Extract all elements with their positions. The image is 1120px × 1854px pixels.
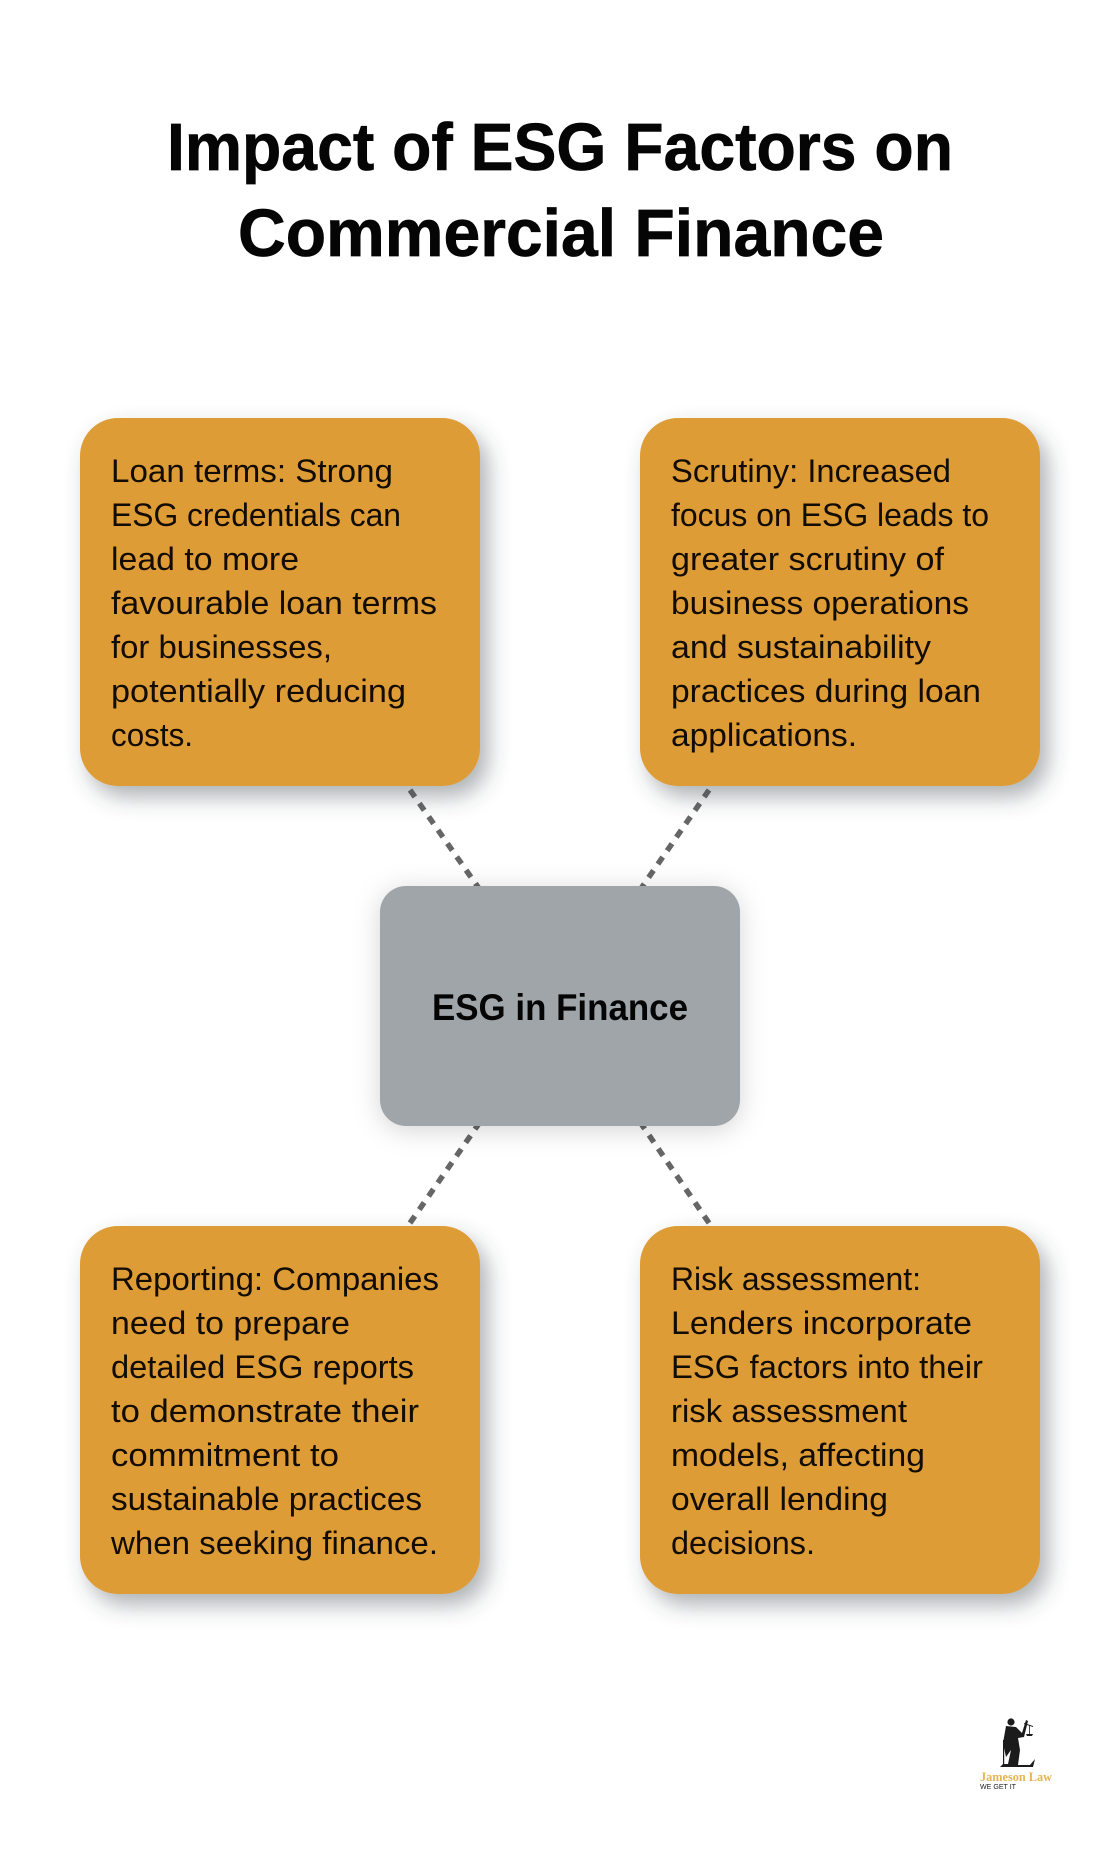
title: Commercial Finance bbox=[238, 196, 884, 271]
title: Impact of ESG Factors on bbox=[167, 110, 953, 185]
panel: risk assessment: models, affecting bbox=[671, 1437, 925, 1473]
panel: centre node: ESG in Finance bbox=[432, 987, 688, 1028]
panel: reporting: when seeking finance. bbox=[110, 1525, 438, 1561]
connector: scrutiny to centre bbox=[640, 790, 709, 890]
panel: risk assessment: Risk assessment: bbox=[671, 1261, 921, 1297]
icon: lady justice bbox=[1000, 1718, 1035, 1767]
panel: scrutiny: Scrutiny: Increased bbox=[671, 453, 951, 489]
panel: reporting: sustainable practices bbox=[111, 1481, 422, 1517]
connector: loan terms to centre bbox=[410, 790, 480, 890]
panel: reporting: need to prepare bbox=[111, 1305, 350, 1341]
panel: scrutiny: practices during loan bbox=[671, 673, 981, 709]
panel: reporting bbox=[80, 1226, 480, 1594]
panel: reporting: detailed ESG reports bbox=[111, 1349, 414, 1385]
panel: reporting: commitment to bbox=[111, 1437, 339, 1473]
panel: scrutiny: business operations bbox=[671, 585, 969, 621]
panel: loan terms: Loan terms: Strong bbox=[111, 453, 393, 489]
panel: risk assessment: decisions. bbox=[671, 1525, 815, 1561]
title bbox=[167, 110, 953, 271]
panel: scrutiny: applications. bbox=[671, 717, 857, 753]
logo: Jameson Law: WE GET IT bbox=[980, 1782, 1016, 1791]
panel: risk assessment: risk assessment bbox=[671, 1393, 907, 1429]
panel: loan terms: favourable loan terms bbox=[111, 585, 437, 621]
panel: reporting: to demonstrate their bbox=[111, 1393, 419, 1429]
panel: risk assessment: Lenders incorporate bbox=[671, 1305, 972, 1341]
panel: loan terms: for businesses, bbox=[111, 629, 332, 665]
panel: scrutiny bbox=[640, 418, 1040, 786]
panel: loan terms: lead to more bbox=[111, 541, 299, 577]
connector: reporting to centre bbox=[410, 1122, 480, 1223]
panel: risk assessment bbox=[640, 1226, 1040, 1594]
panel: loan terms: costs. bbox=[111, 717, 193, 753]
panel: reporting: Reporting: Companies bbox=[111, 1261, 439, 1297]
logo: Jameson Law bbox=[980, 1718, 1053, 1791]
panel: centre node bbox=[380, 886, 740, 1126]
panel: loan terms: potentially reducing bbox=[111, 673, 406, 709]
panel: loan terms: ESG credentials can bbox=[111, 497, 401, 533]
logo: Jameson Law: Jameson Law bbox=[980, 1769, 1053, 1784]
panel: risk assessment: ESG factors into their bbox=[671, 1349, 983, 1385]
panel: scrutiny: and sustainability bbox=[671, 629, 932, 665]
panel: scrutiny: focus on ESG leads to bbox=[671, 497, 989, 533]
panel: scrutiny: greater scrutiny of bbox=[671, 541, 945, 577]
connector: risk assessment to centre bbox=[640, 1122, 709, 1223]
panel: loan terms bbox=[80, 418, 480, 786]
panel: risk assessment: overall lending bbox=[671, 1481, 888, 1517]
